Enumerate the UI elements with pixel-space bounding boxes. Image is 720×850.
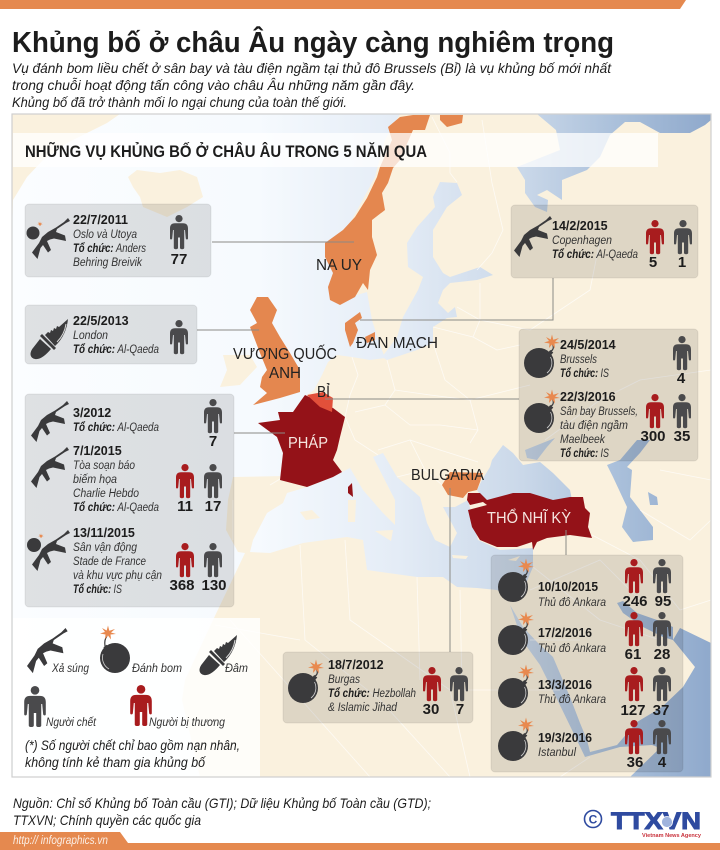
panel: Turkey: 246 <box>622 593 648 610</box>
panel: France: và khu vực phụ cận <box>73 570 162 582</box>
panel: Burgas: 18/7/2012 <box>328 658 384 672</box>
panel: Oslo: 77 <box>171 251 187 268</box>
panel: Brussels: Maelbeek <box>560 434 606 446</box>
country labels: VƯƠNG QUỐC <box>233 345 337 363</box>
panel: France: 11 <box>177 498 193 515</box>
panel: France: biếm họa <box>73 474 117 486</box>
country: Norway <box>325 115 463 305</box>
panel: Copenhagen: Copenhagen <box>552 235 612 247</box>
panel: Turkey: 36 <box>627 754 643 771</box>
panel: Brussels: 4 <box>677 370 686 387</box>
borders <box>215 117 711 777</box>
legend: không tính kẻ tham gia khủng bố <box>25 755 206 770</box>
map frame <box>12 114 711 777</box>
country labels: BỈ <box>317 384 330 401</box>
panel: France: Tổ chức: Al-Qaeda <box>73 422 159 434</box>
panel: Turkey: 95 <box>655 593 671 610</box>
legend <box>13 618 260 777</box>
map of Europe <box>12 114 711 777</box>
land details <box>128 170 520 561</box>
panel: France: Tổ chức: Al-Qaeda <box>73 502 159 514</box>
bottom bar <box>0 832 720 850</box>
panel: Copenhagen: Tổ chức: Al-Qaeda <box>552 249 638 261</box>
legend: (*) Số người chết chỉ bao gồm nạn nhân, <box>25 738 240 753</box>
panel: Turkey: 4 <box>658 754 667 771</box>
panel: Copenhagen: 5 <box>649 254 657 271</box>
panel: Brussels: Sân bay Brussels, <box>560 406 638 418</box>
panel: France: 368 <box>169 577 195 594</box>
logo: Vietnam News Agency <box>642 833 702 839</box>
panel: Turkey: 37 <box>653 702 669 719</box>
sea areas <box>12 114 711 777</box>
panel: Burgas: Burgas <box>328 674 360 686</box>
panel: Copenhagen: 1 <box>678 254 686 271</box>
panel: Oslo: Tổ chức: Anders <box>73 243 146 255</box>
panel: London: 22/5/2013 <box>73 314 129 328</box>
country: Turkey <box>467 493 592 550</box>
panel: Turkey: 61 <box>625 646 641 663</box>
panel: Turkey: Thủ đô Ankara <box>538 597 606 609</box>
country: France <box>258 395 353 497</box>
legend: Xả súng <box>51 661 89 675</box>
panel: Turkey: 17/2/2016 <box>538 626 592 640</box>
panel: Turkey <box>491 555 683 772</box>
panel: Turkey: Thủ đô Ankara <box>538 694 606 706</box>
country labels: BULGARIA <box>411 467 485 484</box>
panel: Burgas: & Islamic Jihad <box>328 702 398 714</box>
panel: Turkey: 127 <box>620 702 646 719</box>
logo: C <box>589 812 598 826</box>
country labels: ANH <box>269 365 301 382</box>
panel: Brussels: 35 <box>674 428 690 445</box>
panel: Brussels: 300 <box>640 428 666 445</box>
country labels: ĐAN MẠCH <box>356 335 438 352</box>
logo <box>584 808 702 839</box>
panel: Brussels: Tổ chức: IS <box>560 368 609 380</box>
heading band: NHỮNG VỤ KHỦNG BỐ Ở CHÂU ÂU TRONG 5 NĂM QUA <box>25 141 427 161</box>
panel: Oslo: 22/7/2011 <box>73 213 128 227</box>
panel: London <box>25 305 197 364</box>
panel: Burgas: 7 <box>456 701 464 718</box>
intro text: Khủng bố đã trở thành mối lo ngại chung của toàn thế giới. <box>12 94 347 110</box>
panel: Copenhagen: 14/2/2015 <box>552 219 608 233</box>
panel: France: 130 <box>201 577 227 594</box>
bottom bar: http:// infographics.vn <box>13 833 108 847</box>
panel: France: Charlie Hebdo <box>73 488 140 500</box>
panel: France: 7 <box>209 433 217 450</box>
panel: Turkey: Thủ đô Ankara <box>538 643 606 655</box>
legend: Đánh bom <box>132 661 182 675</box>
panel: Brussels <box>519 329 698 461</box>
panel: France: 3/2012 <box>73 406 111 420</box>
source text: TTXVN; Chính quyền các quốc gia <box>13 812 201 828</box>
source text: Nguồn: Chỉ số Khủng bố Toàn cầu (GTI); Dữ liệu Khủng bố Toàn cầu (GTD); <box>13 795 431 811</box>
intro text: Vụ đánh bom liều chết ở sân bay và tàu điện ngầm tại thủ đô Brussels (Bỉ) là vụ khủng bố mới nhất <box>12 60 612 76</box>
country labels: THỔ NHĨ KỲ <box>487 509 571 527</box>
panel: London: Tổ chức: Al-Qaeda <box>73 344 159 356</box>
intro text <box>12 60 612 110</box>
panel: France: 17 <box>205 498 221 515</box>
country labels: NA UY <box>316 257 362 274</box>
panel: Turkey: 13/3/2016 <box>538 678 592 692</box>
country: United Kingdom <box>250 297 300 405</box>
panel: Turkey: Istanbul <box>538 747 576 759</box>
panel: France: Sân vận động <box>73 542 138 554</box>
panel: Copenhagen <box>511 205 698 278</box>
panel: France: Stade de France <box>73 556 146 568</box>
panel: Brussels: Brussels <box>560 354 597 366</box>
panel: France: Tổ chức: IS <box>73 584 122 596</box>
country: Denmark <box>345 312 375 347</box>
panel: Oslo <box>25 204 211 277</box>
legend: Người bị thương <box>149 715 225 729</box>
top bar <box>0 0 686 9</box>
panel: France: 7/1/2015 <box>73 444 122 458</box>
country: Bulgaria <box>442 472 483 498</box>
intro text: trong chuỗi hoạt động tấn công vào châu Âu những năm gần đây. <box>12 77 415 93</box>
panel: Brussels: Tổ chức: IS <box>560 448 609 460</box>
title: Khủng bố ở châu Âu ngày càng nghiêm trọng <box>12 25 614 59</box>
panel: Burgas <box>283 652 473 723</box>
panel: France: Tòa soạn báo <box>73 460 136 472</box>
panel: Burgas: Tổ chức: Hezbollah <box>328 688 416 700</box>
leader lines <box>197 242 566 652</box>
legend: Đâm <box>225 661 248 675</box>
panel: Turkey: 10/10/2015 <box>538 580 598 594</box>
source text <box>13 795 431 828</box>
panel: Oslo: Behring Breivik <box>73 257 143 269</box>
logo: TTXVN <box>611 808 701 835</box>
panel: Turkey: 19/3/2016 <box>538 731 592 745</box>
panel: Brussels: tàu điện ngầm <box>560 420 628 432</box>
panel: Burgas: 30 <box>423 701 439 718</box>
panel: Brussels: 24/5/2014 <box>560 338 616 352</box>
panel: France: 13/11/2015 <box>73 526 135 540</box>
panel: Turkey: 28 <box>654 646 670 663</box>
country labels <box>233 257 571 527</box>
heading band <box>13 133 658 167</box>
country labels: PHÁP <box>288 435 328 452</box>
country: Belgium <box>307 392 333 412</box>
panel: London: London <box>73 330 108 342</box>
panel: Brussels: 22/3/2016 <box>560 390 616 404</box>
panel: Oslo: Oslo và Utoya <box>73 229 137 241</box>
legend: Người chết <box>46 715 97 729</box>
panel: France <box>25 394 234 607</box>
